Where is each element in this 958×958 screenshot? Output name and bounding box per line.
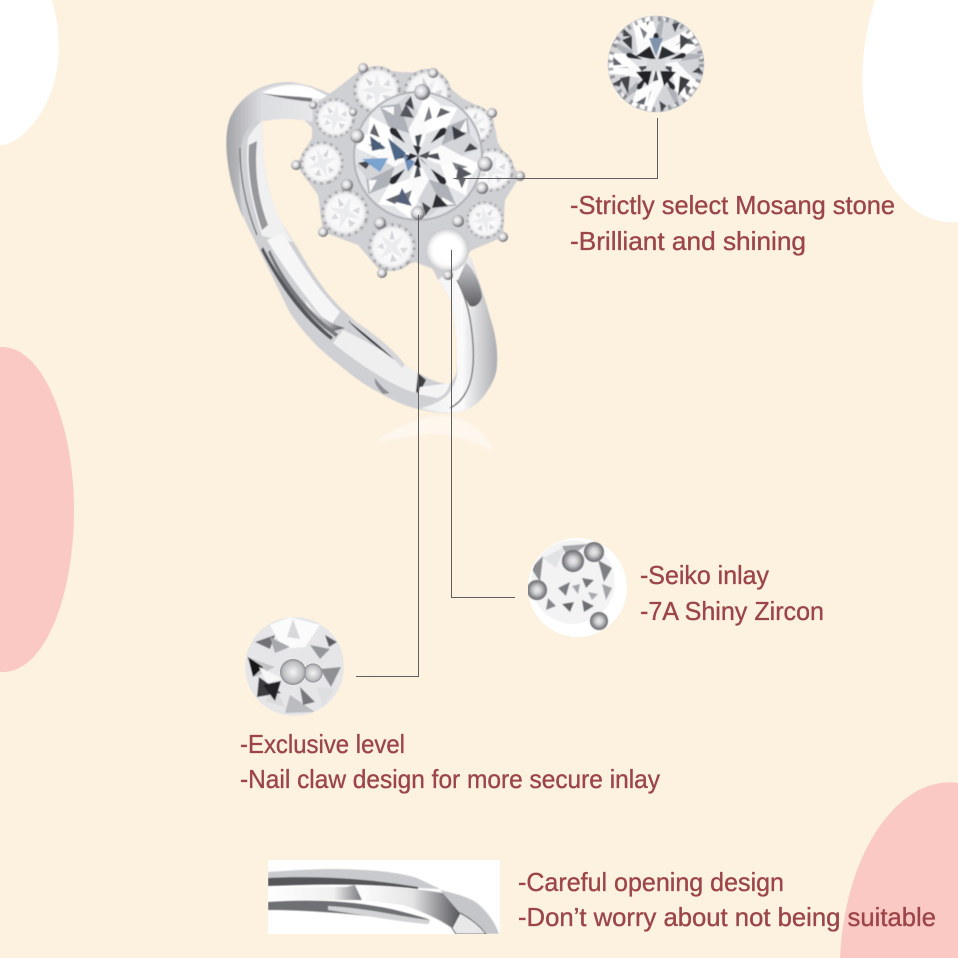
- detail circle: nail claw: [245, 617, 344, 716]
- text: Mosang stone: [570, 190, 895, 256]
- right shank: [420, 255, 497, 413]
- text: exclusive level: -Nail claw design for more secure inlay: [240, 764, 660, 794]
- detail circle: centre stone: [608, 16, 704, 112]
- opening left band: [267, 233, 340, 327]
- text: Seiko inlay: -7A Shiny Zircon: [640, 596, 824, 626]
- text: Mosang stone: -Brilliant and shining: [570, 226, 806, 256]
- centre stone: [354, 92, 482, 220]
- prongs: [291, 63, 525, 280]
- inner wall: [247, 120, 293, 242]
- text: opening design: -Don’t worry about not being suitable: [518, 902, 936, 932]
- text: Seiko inlay: -Seiko inlay: [640, 560, 769, 590]
- text: Mosang stone: -Strictly select Mosang stone: [570, 190, 895, 220]
- text: opening design: -Careful opening design: [518, 867, 784, 897]
- outer face: [226, 84, 345, 218]
- text: Seiko inlay: [640, 560, 824, 626]
- ring photo illustration: [226, 62, 526, 450]
- hole (background colour): [263, 118, 457, 383]
- halo stones: [294, 60, 520, 281]
- opening detail image: [268, 860, 500, 934]
- reflection: [375, 416, 494, 452]
- text: exclusive level: -Exclusive level: [240, 729, 405, 759]
- band: [226, 82, 497, 413]
- detail circle: halo stones and prongs: [528, 538, 627, 637]
- silhouette: [226, 82, 497, 413]
